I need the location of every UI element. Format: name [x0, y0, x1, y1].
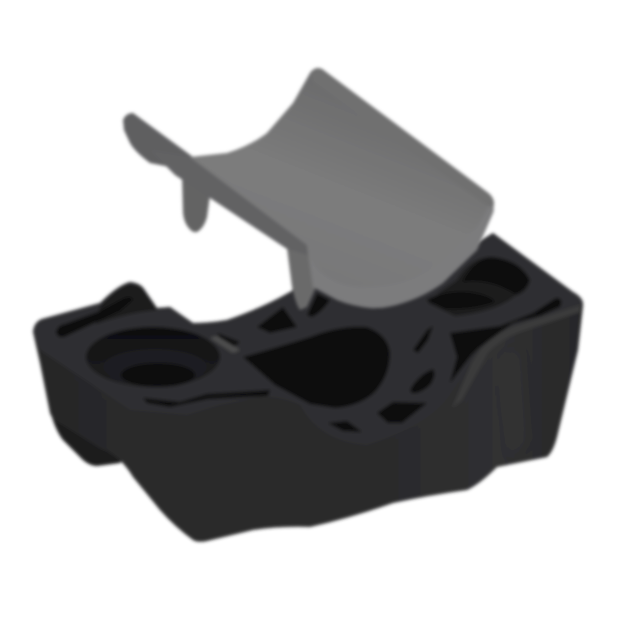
body shading: front flank highlight: [505, 350, 525, 455]
lid top edge: [310, 68, 494, 207]
left cup hole: [121, 363, 195, 387]
hole: right lattice slim: [413, 326, 433, 353]
top face: [33, 233, 583, 445]
slot: under left cup: [143, 390, 270, 407]
left cup outer: [86, 327, 220, 387]
lattice ribs and holes: [56, 293, 561, 432]
grey lid: [123, 68, 494, 310]
slot: right side: [450, 298, 561, 383]
hole: under lid tab: [307, 293, 330, 317]
tab shadow: left raised tab: [96, 284, 157, 324]
clamp base: [33, 233, 583, 542]
slot: left edge: [56, 297, 133, 337]
hole: small lower: [328, 421, 362, 432]
hole: right lattice middle: [410, 369, 434, 393]
lid lower tab: [287, 245, 316, 310]
base silhouette: [33, 233, 583, 542]
lid trough: [190, 68, 494, 308]
right cup outer: [428, 257, 530, 316]
right cup recess: [426, 257, 530, 316]
central cable channel: [243, 327, 390, 408]
lid clip: [182, 175, 210, 232]
right cup hole: [426, 292, 495, 309]
lid flange: [123, 113, 210, 175]
hole: lower lattice: [377, 402, 427, 423]
left cup step: [103, 349, 207, 385]
left cup recess: [86, 327, 220, 387]
hole: centre upper: [257, 307, 297, 333]
right cup upper shadow: [462, 257, 530, 294]
lid front rim: [307, 203, 494, 308]
hole: small left: [217, 333, 240, 347]
lid side edge: [150, 150, 310, 256]
right rim highlight: [452, 305, 580, 408]
highlight: small rib: [210, 336, 240, 353]
rear foot: [50, 400, 140, 466]
